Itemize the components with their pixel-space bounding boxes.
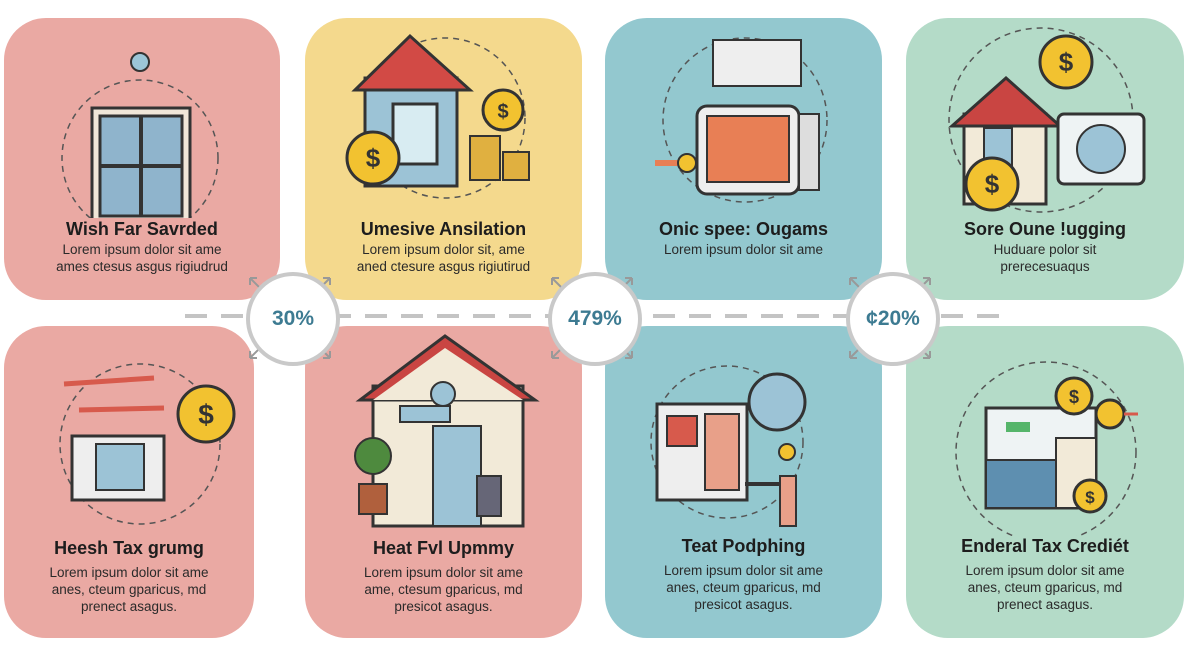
panel: heat pump: [305, 326, 582, 638]
title: Heat Fvl Upmmy: [373, 538, 514, 558]
text: anes, cteum gparicus, md: [968, 580, 1122, 595]
text: anes, cteum gparicus, md: [52, 582, 206, 597]
badge: 30%: [246, 272, 340, 366]
icon: house with coins: $: [366, 143, 381, 173]
title: Heesh Tax grumg: [54, 538, 204, 558]
text: Lorem ipsum dolor sit ame: [62, 242, 222, 257]
title: Sore Oune !ugging: [964, 219, 1126, 239]
badge: 479%: [548, 272, 642, 366]
badge: 30%: 30%: [272, 307, 314, 330]
text: [664, 563, 823, 612]
icon: house and meter: [948, 27, 1146, 213]
text: prenect asagus.: [81, 599, 177, 614]
icon: air unit: [59, 363, 236, 525]
icon: house with heat pump: [354, 334, 540, 528]
panel: insulation: [305, 18, 582, 300]
text: Lorem ipsum dolor sit ame: [49, 565, 209, 580]
icon: house and meter: $: [1059, 47, 1074, 77]
icon: house with coins: [346, 34, 530, 199]
panel: heat pump 2: [605, 326, 882, 638]
title: Wish Far Savrded: [66, 219, 218, 239]
text: aned ctesure asgus rigiutirud: [357, 259, 530, 274]
text: presicot asagus.: [694, 597, 793, 612]
text: Lorem ipsum dolor sit ame: [965, 563, 1125, 578]
text: ames ctesus asgus rigiudrud: [56, 259, 228, 274]
icon: air unit: $: [198, 399, 214, 430]
panel: solar: [605, 18, 882, 300]
icon: unit with meter: [650, 365, 806, 527]
badge: 479%: 479%: [568, 307, 622, 330]
panel: house with meter: [906, 18, 1184, 300]
icon: house with coins: $: [497, 101, 509, 123]
text: ame, ctesum gparicus, md: [364, 582, 523, 597]
icon: screen with coins: $: [1069, 387, 1079, 407]
badge: ¢20%: [846, 272, 940, 366]
badge: ¢20%: ¢20%: [866, 307, 920, 330]
text: Lorem ipsum dolor sit ame: [664, 563, 823, 578]
text: [49, 565, 209, 614]
text: Lorem ipsum dolor sit, ame: [362, 242, 525, 257]
panel: window: [4, 18, 280, 300]
title: Umesive Ansilation: [361, 219, 526, 239]
text: Lorem ipsum dolor sit ame: [664, 242, 823, 257]
panel: AC tax: [4, 326, 254, 638]
icon: solar panel: [655, 37, 828, 203]
icon: screen with coins: [955, 361, 1138, 536]
icon: screen with coins: $: [1085, 488, 1095, 507]
text: [994, 242, 1096, 274]
text: [357, 242, 530, 274]
text: Huduare polor sit: [994, 242, 1096, 257]
text: [965, 563, 1125, 612]
title: Onic spee: Ougams: [659, 219, 828, 239]
text: anes, cteum gparicus, md: [666, 580, 821, 595]
text: Lorem ipsum dolor sit ame: [364, 565, 523, 580]
panel: federal tax credit: [906, 326, 1184, 638]
title: Enderal Tax Crediét: [961, 536, 1129, 556]
text: [56, 242, 228, 274]
text: [364, 565, 523, 614]
text: presicot asagus.: [394, 599, 493, 614]
icon: window: [61, 52, 219, 218]
icon: house and meter: $: [985, 169, 1000, 199]
text: prenect asagus.: [997, 597, 1093, 612]
text: prerecesuaqus: [1000, 259, 1090, 274]
title: Teat Podphing: [682, 536, 805, 556]
